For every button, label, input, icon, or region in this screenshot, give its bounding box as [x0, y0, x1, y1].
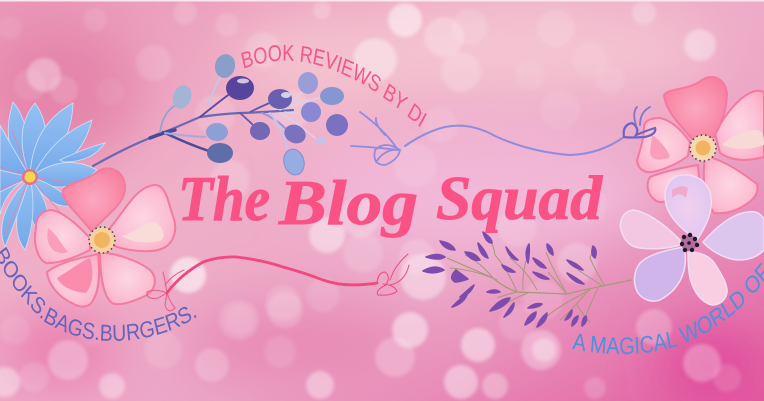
- icon: pink flower left: [35, 168, 175, 307]
- icon: lilac flower centre: [680, 233, 699, 252]
- icon: lavender sprig: [423, 232, 632, 327]
- icon: lilac flower: [620, 175, 764, 305]
- icon: right pink flower centre: [690, 135, 716, 161]
- title: The Blog Squad: Blog: [278, 167, 418, 238]
- icon: blue flower: [0, 102, 105, 250]
- title: The Blog Squad: The: [178, 163, 270, 234]
- icon: purple berry branch: [93, 52, 348, 177]
- icon: pink flower right: [637, 77, 764, 213]
- icon: blue ribbon with bows: [351, 107, 655, 165]
- icon: pink ribbon with bows: [147, 254, 409, 311]
- title: The Blog Squad: Squad: [436, 165, 603, 233]
- icon: left flower centre: [89, 227, 115, 253]
- text: BOOK REVIEWS BY DI: BOOK REVIEWS BY DI: [241, 44, 427, 127]
- title: The Blog Squad: [178, 163, 603, 238]
